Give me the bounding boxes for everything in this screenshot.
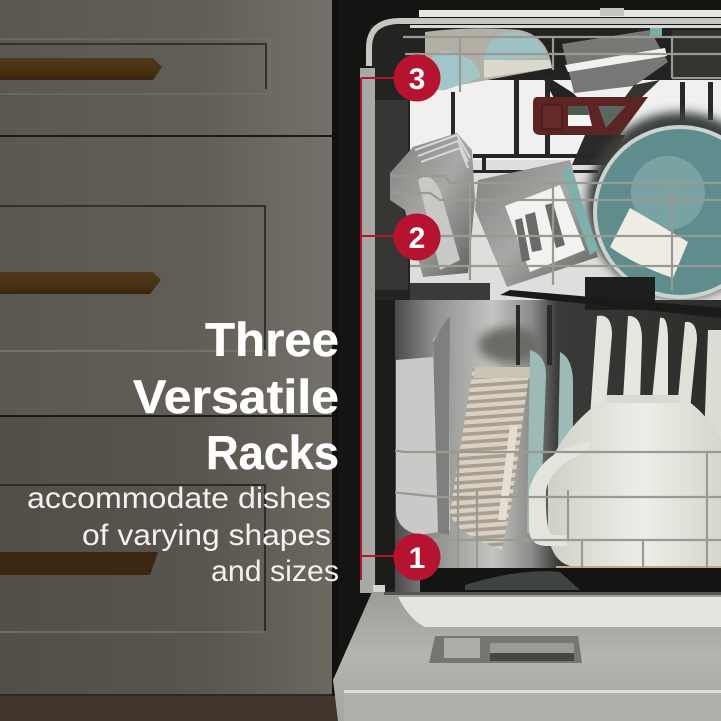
text block: description: of varying shapes [82, 519, 331, 552]
dishes: upper rack bowls and glass [425, 28, 721, 173]
icon: top drawer handle [0, 58, 162, 80]
callout: rack bracket line [361, 78, 400, 580]
callout: number 1 [394, 534, 440, 580]
icon: dark red rack adjuster [533, 97, 648, 135]
dishes: teal side plates [527, 350, 573, 533]
panel: open door [333, 585, 721, 721]
racks: wire rails [390, 37, 721, 575]
panel: dishwasher tub [338, 0, 721, 721]
icon: middle drawer handle [0, 272, 161, 294]
dishes: striped dish [450, 367, 530, 550]
text block: description: and sizes [211, 555, 339, 588]
dishes: baking pan [396, 317, 450, 535]
title [133, 313, 339, 479]
tub floor: lower spray area [376, 290, 721, 592]
dishes: glass containers in middle rack [390, 133, 655, 310]
icon: bottom drawer handle [0, 552, 158, 575]
callout: number 2 [394, 214, 440, 260]
dishes: teal plate and white ramekin [587, 112, 721, 298]
panel: cabinet drawers [0, 0, 345, 721]
title: Three [205, 313, 339, 366]
dishes: large white mug [529, 395, 721, 567]
callout: number 3 [394, 54, 440, 102]
icon: door dispenser [429, 636, 582, 663]
callout: number 2: 2 [409, 222, 425, 255]
callout: number 3: 3 [409, 63, 425, 96]
callout: number 1: 1 [409, 542, 425, 575]
title: Versatile [133, 370, 339, 423]
text block: description: accommodate dishes [27, 482, 331, 515]
dishes: white plates behind mug [590, 316, 721, 440]
text block: description [27, 482, 339, 588]
title: Racks [206, 426, 339, 479]
